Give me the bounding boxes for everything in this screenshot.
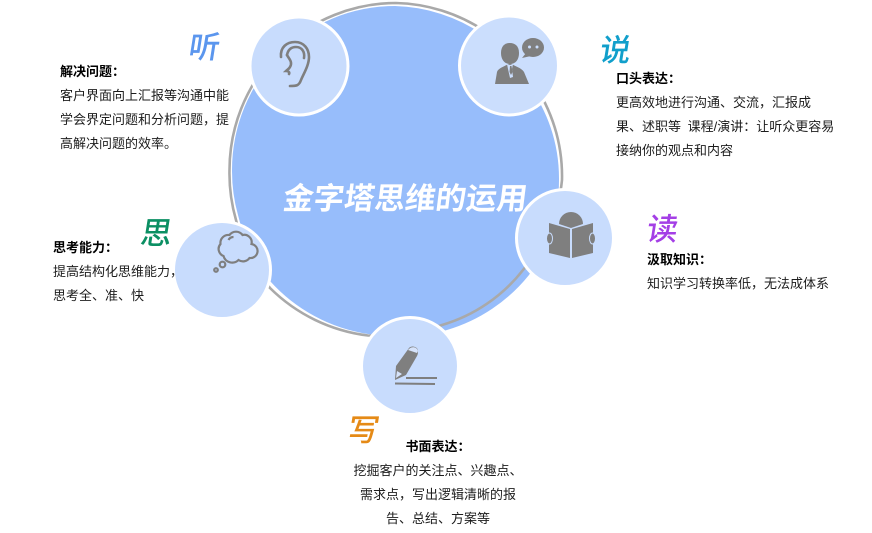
icon: ear	[281, 42, 309, 86]
circle: listen	[250, 17, 348, 115]
text block: 说: 接纳你的观点和内容	[616, 143, 733, 158]
icon: person reading book	[546, 212, 596, 258]
text block: 思: 提高结构化思维能力，	[53, 264, 183, 279]
text block: 写: 需求点，写出逻辑清晰的报	[360, 487, 516, 502]
text block: 思: 思考能力：	[53, 240, 118, 255]
text block: 写: 告、总结、方案等	[386, 511, 490, 526]
text block: 读: 汲取知识：	[647, 252, 712, 267]
circle: think	[174, 222, 270, 318]
heading: 思: 思	[138, 216, 175, 251]
circle: write	[362, 318, 458, 414]
text block: 写: 挖掘客户的关注点、兴趣点、	[353, 463, 522, 478]
icon: thought cloud	[214, 232, 258, 272]
central blue shape	[232, 6, 559, 337]
text block: 说: 更高效地进行沟通、交流，汇报成	[616, 95, 811, 110]
text block: 读	[647, 252, 829, 291]
heading: 听: 听	[186, 30, 223, 65]
heading: 说: 说	[597, 33, 634, 68]
text block: 说	[616, 71, 834, 158]
icon: pencil	[395, 347, 437, 384]
text block: 听: 高解决问题的效率。	[60, 136, 177, 151]
text block: 写: 书面表达：	[405, 439, 470, 454]
text block: 写	[353, 439, 522, 526]
title: 金字塔思维的运用	[281, 182, 529, 216]
heading: 写: 写	[345, 413, 382, 448]
circle: speak	[460, 16, 558, 115]
grey outer ring	[229, 3, 562, 336]
heading: 读: 读	[644, 212, 681, 247]
text block: 听	[60, 64, 229, 151]
text block: 思	[53, 240, 183, 303]
text block: 思: 思考全、准、快	[53, 288, 144, 303]
text block: 读: 知识学习转换率低，无法成体系	[647, 276, 829, 291]
icon: speaker with bubble	[495, 38, 544, 84]
text block: 说: 口头表达：	[616, 71, 681, 86]
text block: 听: 解决问题：	[60, 64, 125, 79]
text block: 说: 果、述职等 课程/演讲：让听众更容易	[616, 119, 834, 134]
text block: 听: 客户界面向上汇报等沟通中能	[60, 88, 229, 103]
circle: read	[516, 190, 614, 286]
text block: 听: 学会界定问题和分析问题，提	[60, 112, 229, 127]
